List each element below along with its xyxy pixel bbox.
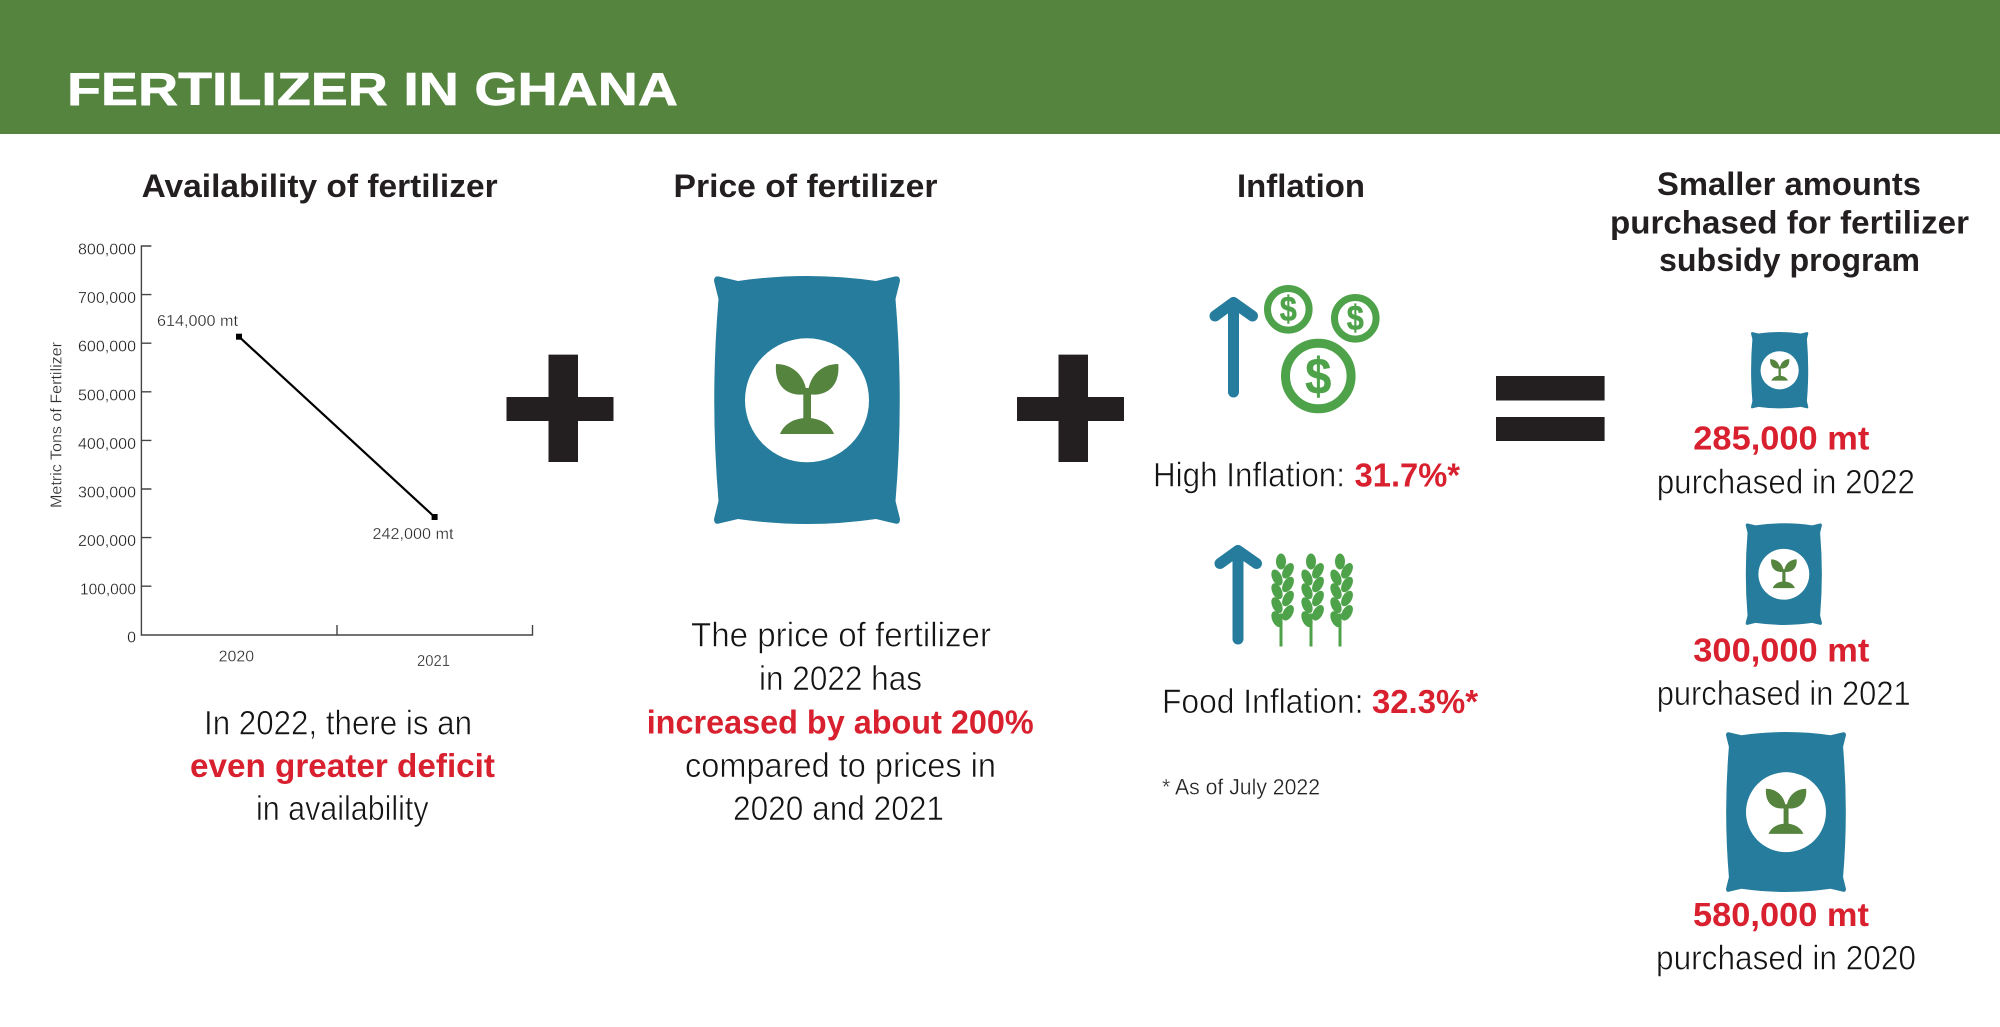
- icon: small bag 2022: [1751, 332, 1808, 408]
- line chart: metric tons of fertilizer: [48, 242, 532, 670]
- y axis labels: [78, 242, 136, 646]
- y axis title: Metric Tons of Fertilizer: [48, 341, 66, 508]
- y axis labels: 400,000: [78, 436, 136, 453]
- price caption: compared to prices in: [685, 747, 996, 785]
- food inflation stat: 32.3%*: [1372, 683, 1478, 720]
- data label 2021: 242,000 mt: [372, 526, 454, 543]
- icon: large fertilizer bag: [714, 276, 900, 524]
- high inflation stat: [1153, 457, 1460, 495]
- icon: arrow up with coins: $: [1280, 290, 1297, 329]
- heading: smaller amounts: [1610, 166, 1969, 278]
- amount 2020: 580,000 mt: [1693, 896, 1869, 933]
- y axis labels: 800,000: [78, 242, 136, 258]
- amount 2021: 300,000 mt: [1693, 632, 1869, 669]
- price caption: 2020 and 2021: [733, 790, 944, 828]
- heading: availability: Availability of fertilizer: [142, 168, 498, 204]
- data label 2020: 614,000 mt: [157, 313, 239, 330]
- amount 2022: [1657, 419, 1915, 501]
- y axis and x axis: [141, 246, 532, 635]
- heading: smaller amounts: subsidy program: [1659, 242, 1920, 278]
- high inflation stat: 31.7%*: [1355, 457, 1460, 494]
- y axis labels: 100,000: [80, 582, 136, 599]
- x label 2020: 2020: [219, 649, 254, 666]
- availability caption: even greater deficit: [190, 747, 495, 784]
- icon: arrow up with wheat: [1220, 550, 1355, 646]
- heading: price: Price of fertilizer: [674, 168, 938, 204]
- operator: equals: [1496, 376, 1605, 441]
- high inflation stat: High Inflation:: [1153, 457, 1345, 495]
- x label 2021: 2021: [417, 653, 450, 670]
- amount 2021: purchased in 2021: [1657, 675, 1911, 713]
- panel: inflation: [1153, 168, 1478, 800]
- icon: arrow up with coins: $: [1347, 299, 1364, 338]
- price caption: [647, 617, 1034, 828]
- y axis labels: 200,000: [78, 533, 136, 550]
- amount 2020: purchased in 2020: [1656, 939, 1916, 977]
- y axis labels: 300,000: [78, 484, 136, 502]
- price caption: increased by about 200%: [647, 703, 1034, 740]
- icon: arrow up with coins: $: [1305, 347, 1331, 404]
- y axis labels: 600,000: [78, 339, 136, 356]
- y axis labels: 500,000: [78, 387, 136, 404]
- footnote: * As of July 2022: [1162, 775, 1320, 800]
- availability caption: In 2022, there is an: [204, 705, 472, 743]
- amount 2021: [1657, 632, 1911, 713]
- availability caption: [190, 705, 495, 828]
- panel: smaller amounts purchased: [1610, 166, 1969, 977]
- heading: inflation: Inflation: [1237, 168, 1365, 204]
- availability caption: in availability: [256, 790, 429, 828]
- price caption: The price of fertilizer: [691, 617, 991, 655]
- panel: price of fertilizer: [647, 168, 1034, 828]
- icon: large bag 2020: [1726, 732, 1846, 892]
- amount 2022: 285,000 mt: [1693, 419, 1869, 456]
- food inflation stat: Food Inflation:: [1162, 683, 1364, 721]
- amount 2020: [1656, 896, 1916, 977]
- food inflation stat: [1162, 683, 1478, 721]
- amount 2022: purchased in 2022: [1657, 463, 1915, 501]
- panel: availability of fertilizer: [48, 168, 532, 828]
- y axis labels: 0: [127, 630, 136, 646]
- y axis labels: 700,000: [78, 290, 136, 307]
- heading: smaller amounts: purchased for fertilizer: [1610, 204, 1969, 240]
- icon: medium bag 2021: [1746, 523, 1822, 625]
- data line: [236, 334, 438, 520]
- price caption: in 2022 has: [759, 660, 922, 698]
- title: FERTILIZER IN GHANA: [67, 63, 678, 115]
- operator: plus 2: [1017, 355, 1124, 462]
- header banner: [0, 0, 2000, 134]
- icon: arrow up with coins: [1215, 288, 1376, 409]
- operator: plus 1: [506, 355, 614, 462]
- heading: smaller amounts: Smaller amounts: [1657, 166, 1921, 202]
